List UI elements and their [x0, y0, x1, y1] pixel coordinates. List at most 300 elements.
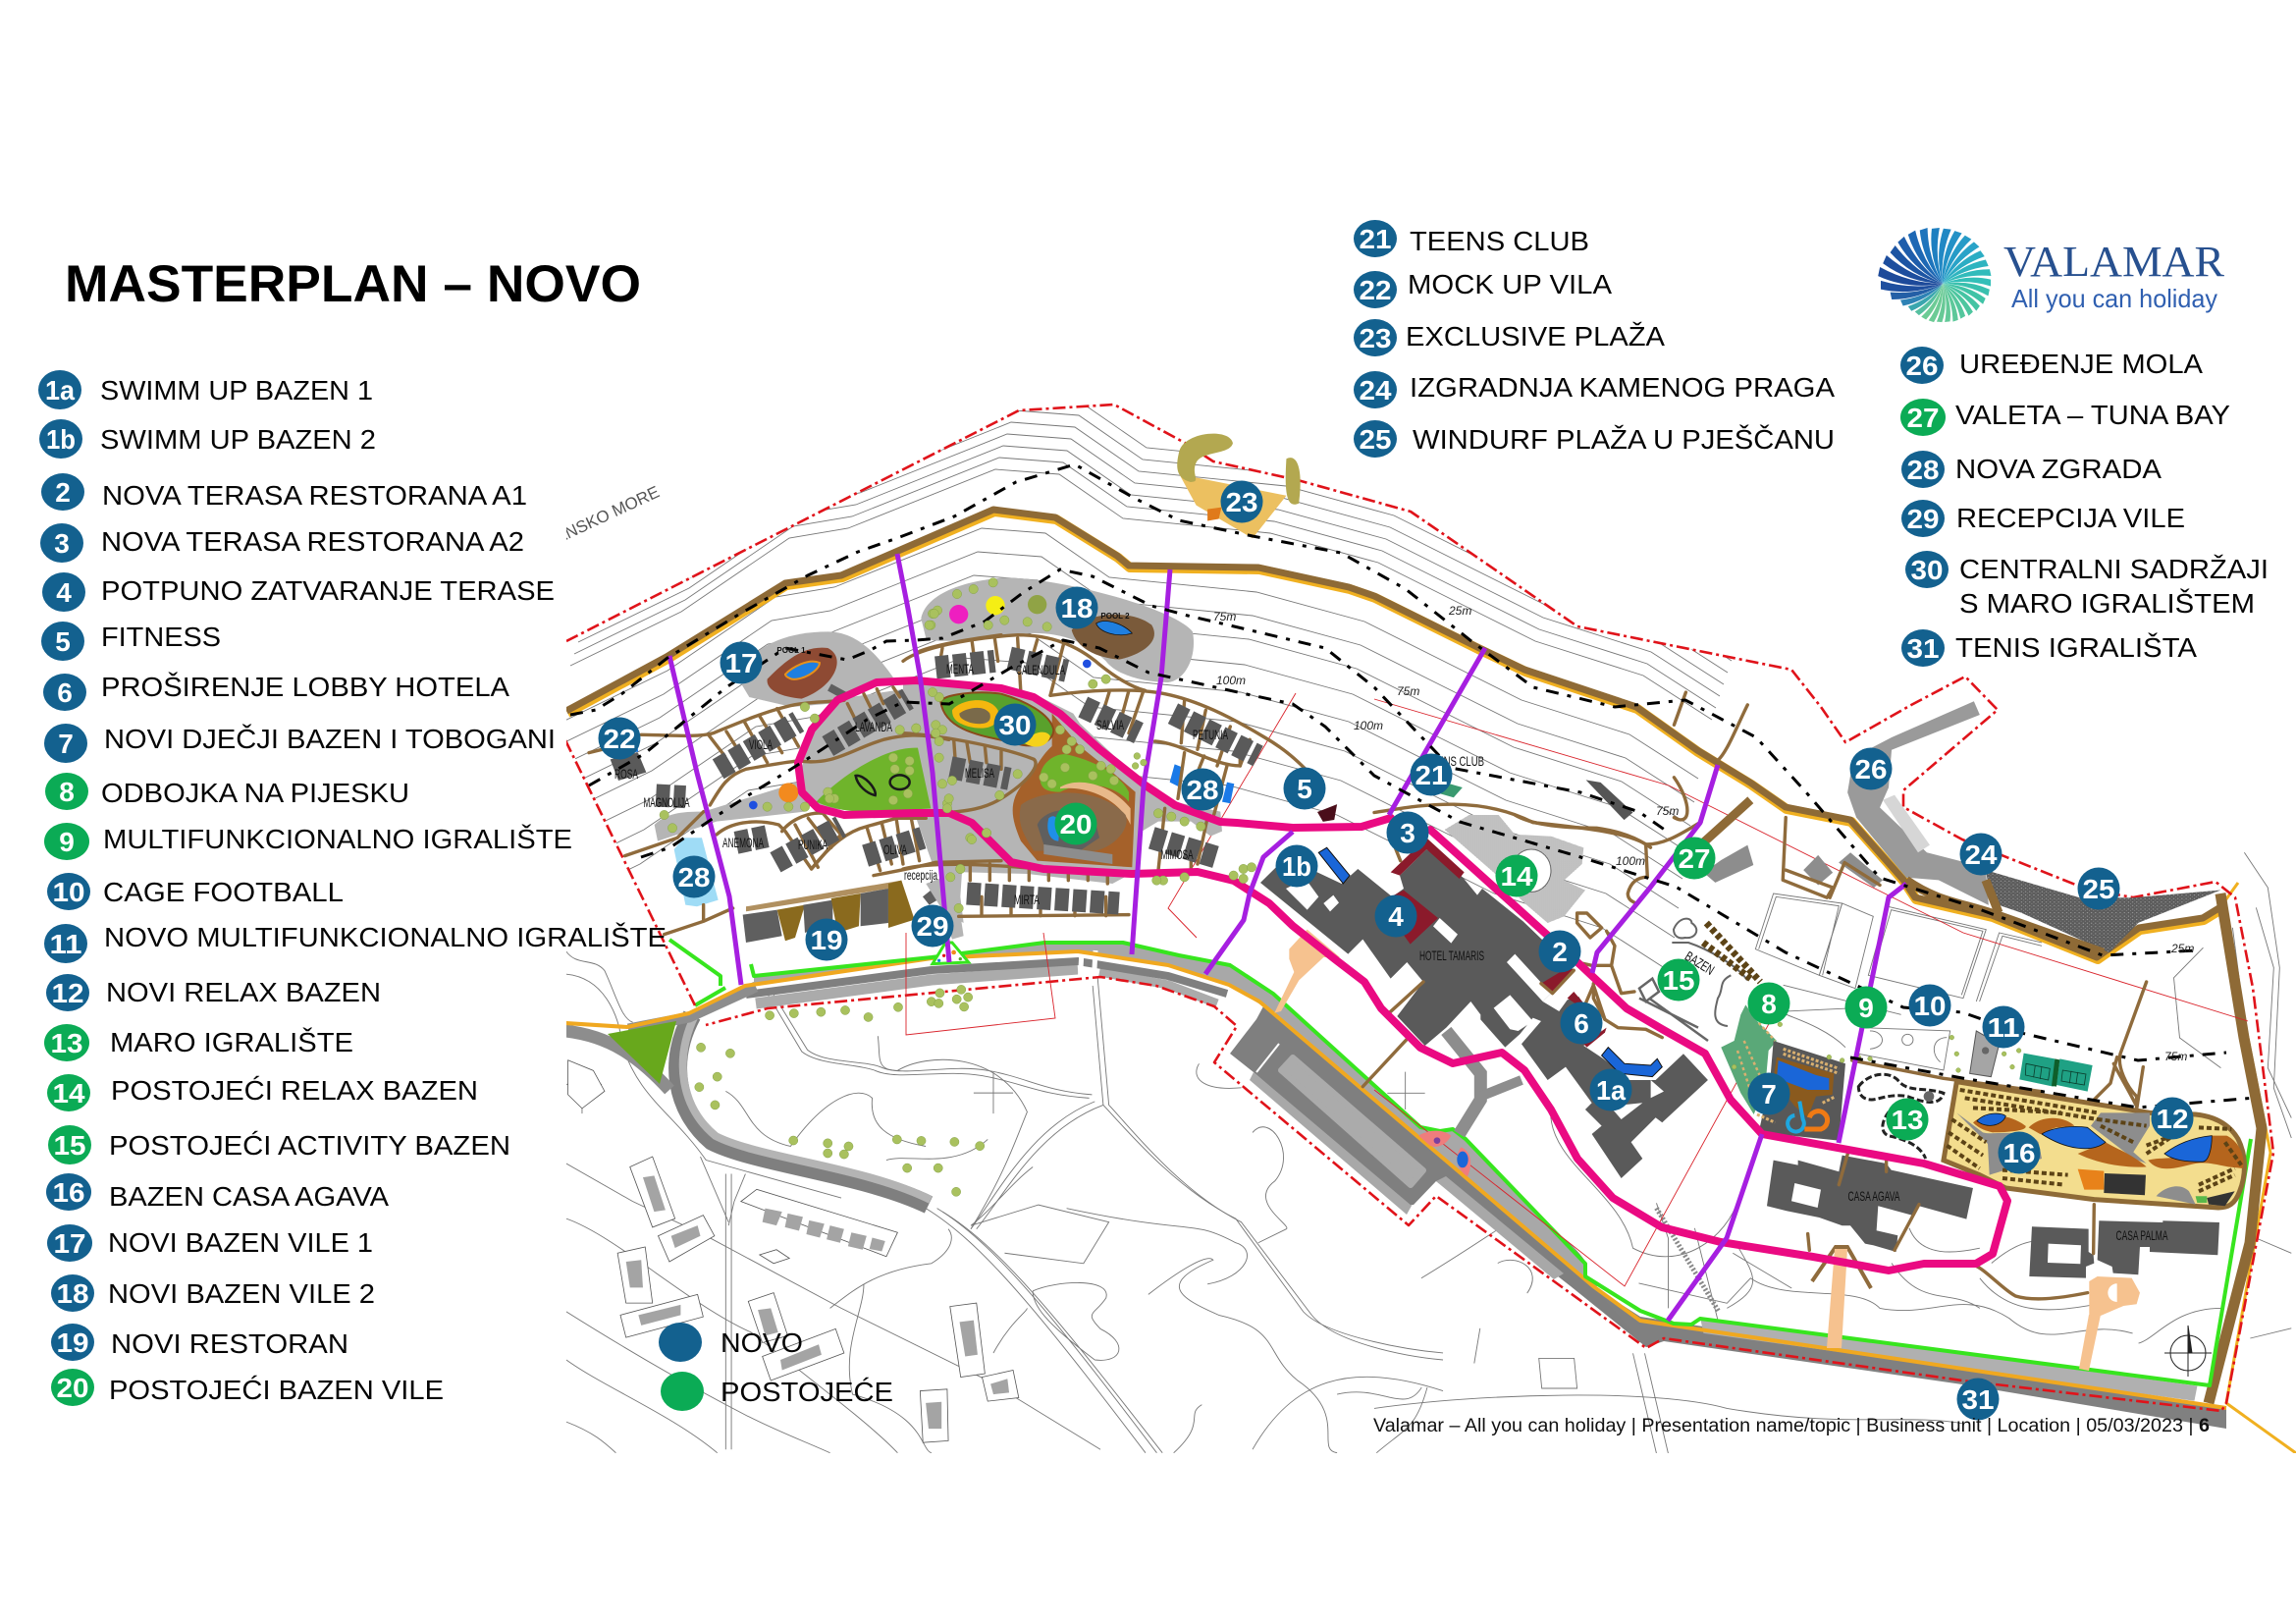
lanes north-east	[1374, 692, 1880, 897]
labels: pools: POOL 2	[1100, 612, 1130, 621]
label: sea name: JADRANSKO MORE	[512, 482, 663, 566]
pool deck: tan area	[1944, 1082, 2244, 1208]
item 22	[1354, 269, 1612, 308]
item 30: CENTRALNI SADRŽAJI	[1959, 554, 2269, 584]
area 7 slide orange	[1804, 1111, 1828, 1129]
pool: 1b	[1318, 847, 1350, 884]
key: postojeće	[661, 1372, 893, 1411]
pin 19: 19	[811, 925, 842, 955]
amenity: seating tan arc	[1060, 783, 1131, 825]
item 28: NOVA ZGRADA	[1955, 454, 2162, 484]
park: green lawn	[817, 748, 931, 812]
pink islands	[1418, 1131, 1470, 1176]
item 18	[51, 1274, 375, 1312]
item 2	[41, 473, 527, 511]
contour lines: lower left terrain	[565, 950, 1443, 1453]
labels: buildings: TEENS CLUB	[1425, 753, 1484, 769]
pool 18 water	[1096, 622, 1132, 635]
labels: villas: LAVANDA	[855, 719, 892, 734]
item 31: TENIS IGRALIŠTA	[1955, 632, 2197, 663]
rosa patch	[635, 748, 638, 752]
building: Casa Agava	[1767, 1156, 1973, 1252]
road: north access strip	[746, 943, 1286, 1006]
new building 28 east	[1170, 764, 1234, 803]
palms: deck chairs	[1947, 1090, 2241, 1191]
pin 27: 27	[1679, 843, 1710, 874]
tennis courts	[2019, 1054, 2093, 1092]
item 24: IZGRADNJA KAMENOG PRAGA	[1410, 372, 1835, 403]
item 25: WINDURF PLAŽA U PJEŠČANU	[1413, 424, 1835, 455]
amenity: area 30 sand	[959, 708, 990, 724]
logo: Valamar	[1878, 228, 2225, 323]
grey development areas around villas	[655, 577, 1222, 923]
pin 27	[1673, 837, 1716, 880]
road: south coastal strip	[1621, 1304, 2226, 1429]
pin 5: 5	[1297, 774, 1312, 804]
item 13: MARO IGRALIŠTE	[110, 1027, 353, 1057]
item 28	[1901, 451, 2162, 488]
pin 15	[1657, 958, 1700, 1001]
pin 23: 23	[1225, 487, 1258, 517]
item 26: UREĐENJE MOLA	[1959, 349, 2203, 379]
item 23: EXCLUSIVE PLAŽA	[1406, 321, 1665, 352]
logo tagline: All you can holiday	[2011, 284, 2217, 313]
item 14: POSTOJEĆI RELAX BAZEN	[111, 1075, 478, 1106]
pin 18	[1056, 587, 1097, 628]
traffic island: green triangle	[608, 1021, 676, 1084]
item 6: PROŠIRENJE LOBBY HOTELA	[101, 672, 509, 702]
item 5: 5	[55, 626, 71, 657]
item 7: NOVI DJEČJI BAZEN I TOBOGANI	[104, 724, 556, 754]
pin 4	[1374, 895, 1417, 937]
restaurant orange block	[2078, 1169, 2104, 1190]
pin 23	[1221, 481, 1262, 522]
labels: elevation: 25m	[1448, 604, 1471, 618]
amenity: area 30 green mound	[940, 692, 1053, 745]
trees: south meadow	[695, 985, 985, 1196]
pin 2: 2	[1552, 937, 1568, 967]
item 2: 2	[55, 477, 71, 508]
pin 26	[1849, 748, 1893, 789]
trees: villa gardens east	[912, 578, 1256, 885]
item 24	[1354, 371, 1835, 408]
pin 25	[2077, 868, 2120, 909]
promenade and access roads	[565, 510, 2296, 1453]
areas 7, 8, 13, 15 and Casa Agava	[1639, 919, 2042, 1252]
item 19: 19	[57, 1327, 88, 1358]
item 26: 26	[1906, 351, 1938, 381]
compass: north arrow	[2164, 1326, 2212, 1377]
pin 21: 21	[1415, 760, 1447, 790]
item 11: NOVO MULTIFUNKCIONALNO IGRALIŠTE	[104, 922, 667, 952]
item 21: TEENS CLUB	[1410, 226, 1589, 256]
labels: buildings: HOTEL TAMARIS	[1419, 947, 1484, 963]
amenity: seating deck	[1020, 792, 1127, 851]
grey paving	[1956, 1112, 2196, 1205]
labels: pools	[776, 612, 1130, 655]
amenity: pool water	[1047, 816, 1059, 841]
labels: villas: SALVIA	[1096, 717, 1124, 732]
key: novo	[659, 1323, 803, 1362]
rosa villa	[611, 753, 646, 781]
labels: villas: recepcija	[904, 867, 937, 883]
legend: items 21 to 25	[1354, 220, 1835, 458]
item 19: NOVI RESTORAN	[111, 1328, 348, 1359]
labels: elevation: 25m	[2170, 942, 2194, 955]
building: Hotel Tamaris	[1260, 849, 1708, 1178]
pin 5	[1284, 768, 1325, 809]
pins: map numbers	[599, 481, 2193, 1420]
legend: items 26 to 31	[1900, 347, 2269, 667]
item 20: 20	[57, 1373, 88, 1403]
item 7: 7	[58, 729, 74, 759]
labels: elevation: 75m	[1397, 684, 1419, 698]
item 13: 13	[51, 1028, 82, 1058]
pin 16: 16	[2002, 1138, 2036, 1168]
pin 6	[1561, 1001, 1602, 1045]
labels: villas: MENTA	[946, 661, 974, 677]
pin 22: 22	[603, 724, 636, 754]
item 18: 18	[57, 1278, 88, 1309]
item 1a	[38, 370, 373, 409]
building: Casa Palma	[2029, 1220, 2219, 1278]
brown links at Casa Agava	[1808, 1060, 2042, 1250]
item 30	[1905, 551, 2269, 619]
pool 17 deck	[768, 648, 837, 699]
item 29: RECEPCIJA VILE	[1956, 503, 2185, 533]
labels: villas	[614, 661, 1228, 907]
item 30: S MARO IGRALIŠTEM	[1959, 588, 2255, 619]
road: parking strip by hotel	[1230, 994, 1664, 1347]
villa buildings	[656, 658, 1258, 903]
courtyards	[1286, 879, 1664, 1119]
pin 16	[1999, 1131, 2040, 1174]
labels: villas: ROSA	[614, 766, 638, 782]
area 8 chairs	[1737, 1023, 1775, 1107]
key: novo: NOVO	[721, 1327, 803, 1358]
area 14: existing relax pool	[1445, 815, 1585, 923]
pin 9	[1845, 986, 1887, 1029]
amenity: pool surround	[1038, 810, 1099, 851]
amenity: green lawn	[1041, 754, 1129, 802]
corner dark block	[2207, 1191, 2235, 1206]
item 1b: 1b	[46, 424, 76, 455]
pin 24: 24	[1965, 839, 1998, 870]
areas 12, 16, tennis and Casa Palma	[1944, 982, 2244, 1316]
area 8: volleyball green terrace	[1721, 1004, 1777, 1114]
pin 3	[1386, 811, 1429, 854]
labels: villas: MAGNOLIJA	[644, 794, 690, 810]
area 7 deck chairs	[1757, 1049, 1839, 1122]
item 21	[1354, 220, 1589, 257]
area 27 wide lane	[1703, 800, 1750, 842]
pin 30	[993, 703, 1037, 746]
area 30 and 20: central amenities	[940, 595, 1234, 867]
labels: elevation: 75m	[1213, 610, 1236, 623]
item 10: 10	[53, 877, 84, 907]
item 15: 15	[53, 1130, 86, 1161]
amenity: yellow apron	[1024, 732, 1050, 747]
map labels	[512, 482, 2212, 1377]
item 1a: SWIMM UP BAZEN 1	[100, 375, 373, 406]
labels: villas: ANEMONA	[722, 835, 764, 850]
labels: villas: PUNIKA	[798, 837, 828, 852]
labels: villas: PETUNIA	[1193, 727, 1228, 742]
garden dots	[949, 595, 1092, 668]
amenity: lower terrace	[1043, 844, 1112, 864]
item 8	[45, 773, 409, 810]
area 11 ball	[1982, 1047, 1989, 1055]
area 7 water	[1777, 1060, 1829, 1090]
item 10	[47, 873, 344, 910]
pin 3: 3	[1400, 818, 1415, 848]
contour lines: east terrain	[1374, 852, 2291, 1453]
contour lines: hillside	[529, 399, 1735, 972]
pier hatch	[1883, 795, 1930, 852]
pin 8	[1747, 982, 1790, 1025]
labels: elevation: 100m	[1216, 674, 1246, 687]
item 29: 29	[1906, 504, 1940, 534]
pool 17 connector	[829, 687, 847, 697]
item 31: 31	[1906, 633, 1940, 664]
pin 7	[1747, 1072, 1790, 1115]
labels: pools: POOL 1	[776, 646, 806, 655]
area 13 play circle	[1924, 1091, 1934, 1102]
pin 15: 15	[1663, 965, 1694, 996]
labels: elevation: 75m	[2164, 1050, 2187, 1063]
item 2: NOVA TERASA RESTORANA A1	[102, 480, 527, 511]
item 11: 11	[49, 929, 82, 959]
item 6	[43, 672, 509, 711]
pin 17	[721, 642, 762, 683]
key: postojeće: POSTOJEĆE	[721, 1377, 893, 1407]
pin 1b	[1276, 844, 1317, 888]
reception triangle	[933, 943, 969, 964]
item 25: 25	[1359, 424, 1392, 455]
pool 17 water	[785, 662, 820, 679]
labels: elevation: 75m	[1656, 804, 1679, 818]
item 10: CAGE FOOTBALL	[103, 877, 344, 907]
restaurant dark block	[2104, 1173, 2146, 1195]
item 9: MULTIFUNKCIONALNO IGRALIŠTE	[103, 824, 572, 854]
west villas and pool 17	[610, 648, 969, 964]
item 26	[1900, 347, 2203, 384]
amenity: area 30 playground	[952, 700, 998, 729]
item 20: POSTOJEĆI BAZEN VILE	[109, 1375, 444, 1405]
pin 31: 31	[1961, 1384, 1995, 1415]
pin 22	[599, 717, 640, 760]
pin 10: 10	[1914, 991, 1946, 1021]
car parks	[1803, 852, 1883, 888]
labels: villas: MELISA	[965, 765, 994, 781]
beach: areas 24 and 25 stone	[1986, 870, 2220, 952]
item 15	[48, 1125, 510, 1164]
connectors: purple paths	[669, 554, 1906, 1321]
item 9	[44, 823, 572, 860]
area 7 deck brown	[1774, 1057, 1834, 1117]
amenity: brown deck around pool 20	[1013, 714, 1136, 867]
pin 19	[805, 919, 848, 960]
labels: buildings	[1419, 753, 2168, 1243]
item 25	[1354, 420, 1835, 458]
crosshair	[1387, 1072, 1425, 1110]
black dashed contour lines: 75m and 100m	[570, 464, 2256, 1108]
brown links	[1973, 982, 2147, 1299]
item 16: BAZEN CASA AGAVA	[109, 1181, 389, 1212]
pin 18: 18	[1060, 593, 1094, 623]
title: MASTERPLAN – NOVO	[65, 255, 641, 313]
project boundary: red dash-dot	[565, 405, 2273, 1411]
sports fields: outlines	[1755, 893, 2042, 1070]
item 5	[41, 622, 221, 661]
labels: villas: OLIVA	[883, 841, 907, 857]
peach walkway Palma	[2089, 1276, 2140, 1316]
footer: Valamar – All you can holiday | Presentation name/topic | Business unit | Location | 05/03/2023 | 6	[1373, 1416, 2210, 1436]
villa access lanes	[589, 635, 1306, 935]
item 23	[1354, 319, 1665, 356]
labels: buildings: BAZEN	[1682, 947, 1717, 978]
pin 26: 26	[1855, 754, 1887, 785]
item 9: 9	[59, 827, 75, 857]
surrounding buildings: lower left hatched blocks	[568, 1060, 1019, 1442]
area 21 block	[1436, 783, 1463, 797]
item 1a: 1a	[45, 375, 75, 406]
item 17: NOVI BAZEN VILE 1	[108, 1227, 373, 1258]
item 16	[46, 1173, 389, 1212]
pier: area 26	[1847, 701, 1989, 905]
item 5: FITNESS	[101, 622, 221, 652]
labels: buildings: CASA PALMA	[2116, 1227, 2168, 1243]
item 22: 22	[1359, 275, 1392, 305]
item 8: 8	[59, 777, 75, 807]
pin 30: 30	[999, 710, 1031, 740]
item 1b	[39, 419, 376, 459]
item 16: 16	[53, 1177, 84, 1208]
item 14	[47, 1074, 478, 1111]
item 20	[51, 1369, 444, 1406]
pin 28 east	[1182, 768, 1223, 811]
item 28: 28	[1906, 455, 1940, 485]
labels: elevation: 100m	[1354, 719, 1383, 732]
labels: villas: MIRTA	[1014, 892, 1040, 907]
pin 21	[1410, 754, 1453, 795]
terraces: dark red wings	[1391, 838, 1607, 1048]
roundabout spur	[1480, 1080, 1522, 1097]
pin 13	[1887, 1098, 1928, 1141]
brown beach walk	[1906, 880, 2104, 952]
pin 12	[2152, 1098, 2193, 1139]
area 27 building	[1703, 845, 1753, 883]
pin 6: 6	[1574, 1008, 1589, 1039]
item 3: 3	[54, 528, 70, 559]
area 15: pool outlines	[1672, 919, 1747, 1026]
item 15: POSTOJEĆI ACTIVITY BAZEN	[109, 1130, 510, 1161]
reception building	[923, 891, 937, 905]
item 29	[1901, 500, 2185, 537]
area 15 palm grove	[1703, 923, 1760, 982]
area 7: deck	[1759, 1041, 1845, 1141]
brown deck shapes	[1973, 1115, 2244, 1168]
item 1b: SWIMM UP BAZEN 2	[100, 424, 376, 455]
item 27: VALETA – TUNA BAY	[1955, 400, 2230, 430]
area 14 lagoon	[1512, 849, 1551, 892]
pool: 1a	[1602, 1048, 1662, 1077]
pool 18 deck	[1072, 615, 1154, 660]
labels: villas: CALENDULA	[1016, 662, 1065, 677]
corner green block	[2196, 1196, 2207, 1203]
pin 1b: 1b	[1282, 851, 1311, 882]
pin 7: 7	[1761, 1079, 1777, 1110]
pin 1a	[1590, 1068, 1631, 1111]
pin 28 west	[673, 856, 715, 897]
item 17: 17	[53, 1228, 86, 1259]
item 27	[1900, 399, 2230, 436]
reception area	[926, 871, 964, 940]
hotel Tamaris complex	[1260, 815, 1708, 1178]
pin 17: 17	[724, 648, 758, 678]
item 24: 24	[1359, 375, 1392, 406]
legend: items 1a to 20	[38, 370, 667, 1406]
trees at field	[1732, 1022, 2021, 1072]
item 4	[42, 572, 555, 612]
walkway: Casa Palma stem to coast	[2079, 1315, 2101, 1371]
pin 14: 14	[1500, 861, 1533, 892]
area 15 service building	[1639, 979, 1708, 1041]
item 3	[40, 523, 524, 563]
item 12: 12	[51, 978, 84, 1008]
pedestrian promenade: magenta	[798, 680, 2007, 1271]
brown beach connector	[1986, 880, 1999, 913]
item 8: ODBOJKA NA PIJESKU	[101, 778, 409, 808]
new building 28 west	[674, 838, 719, 906]
roundabout centre	[1498, 1065, 1513, 1080]
pin 8: 8	[1761, 989, 1777, 1019]
pin 20	[1054, 803, 1097, 844]
pin 11: 11	[1987, 1012, 2020, 1043]
pools: blue	[1977, 1113, 2212, 1162]
labels: elevation: 100m	[1616, 854, 1645, 868]
labels: villas: MIMOSA	[1160, 846, 1194, 862]
pin 29: 29	[917, 911, 948, 942]
pin 12: 12	[2156, 1104, 2189, 1134]
item 12: NOVI RELAX BAZEN	[106, 977, 381, 1007]
area 23: exclusive beach	[1177, 434, 1337, 822]
item 19	[51, 1324, 348, 1361]
item 22: MOCK UP VILA	[1408, 269, 1612, 299]
icon: shell fan	[1878, 228, 1991, 323]
labels: villas: VIOLA	[749, 736, 773, 752]
item 18: NOVI BAZEN VILE 2	[108, 1278, 375, 1309]
area 11: cage	[1970, 1031, 2000, 1077]
pin 4: 4	[1388, 901, 1404, 932]
item 17	[47, 1224, 373, 1262]
north-east shoreline: pier, beach and lanes	[1374, 692, 2220, 952]
access road to roundabout	[1446, 1031, 1480, 1134]
item 7	[44, 724, 556, 763]
item 31	[1901, 629, 2197, 667]
labels: buildings: CASA AGAVA	[1847, 1188, 1900, 1204]
pin 1a: 1a	[1596, 1075, 1626, 1106]
pin 9: 9	[1858, 993, 1874, 1023]
item 6: 6	[57, 677, 73, 708]
walkway: peach	[1274, 930, 1340, 1013]
trees: villa gardens west	[660, 609, 991, 913]
area 13: maro playground	[1858, 1074, 1944, 1159]
item 12	[46, 974, 381, 1011]
legend: status key	[659, 1323, 893, 1411]
hotel brown links	[1362, 815, 1701, 1087]
item 13	[44, 1024, 353, 1061]
